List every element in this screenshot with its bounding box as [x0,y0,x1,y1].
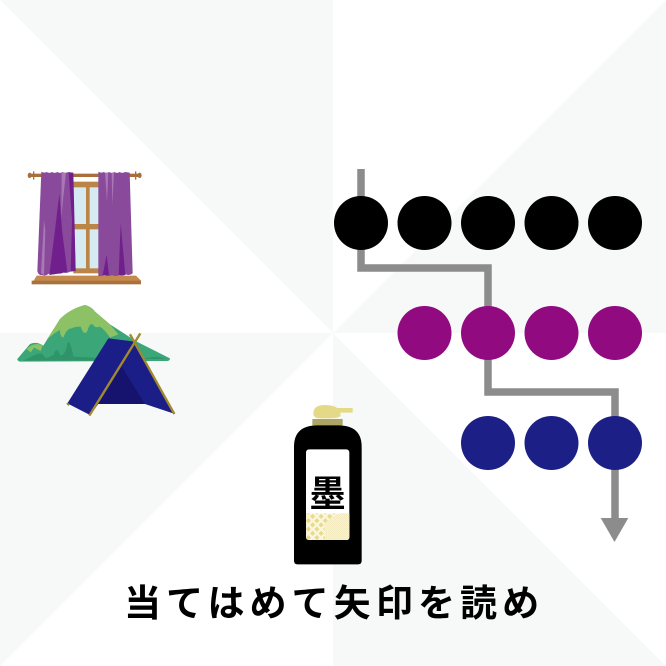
purple circle row [398,306,642,360]
icon: mountain and tent [17,305,175,416]
blue circle row [461,416,642,470]
black circle row [334,196,642,250]
tent [67,333,175,416]
label kanji: 墨 [310,465,346,517]
arrow path [361,169,628,542]
title: 当てはめて矢印を読め [124,583,544,624]
mountain [17,305,170,362]
icon: ink bottle [294,405,362,564]
icon: window with curtains [28,171,142,284]
